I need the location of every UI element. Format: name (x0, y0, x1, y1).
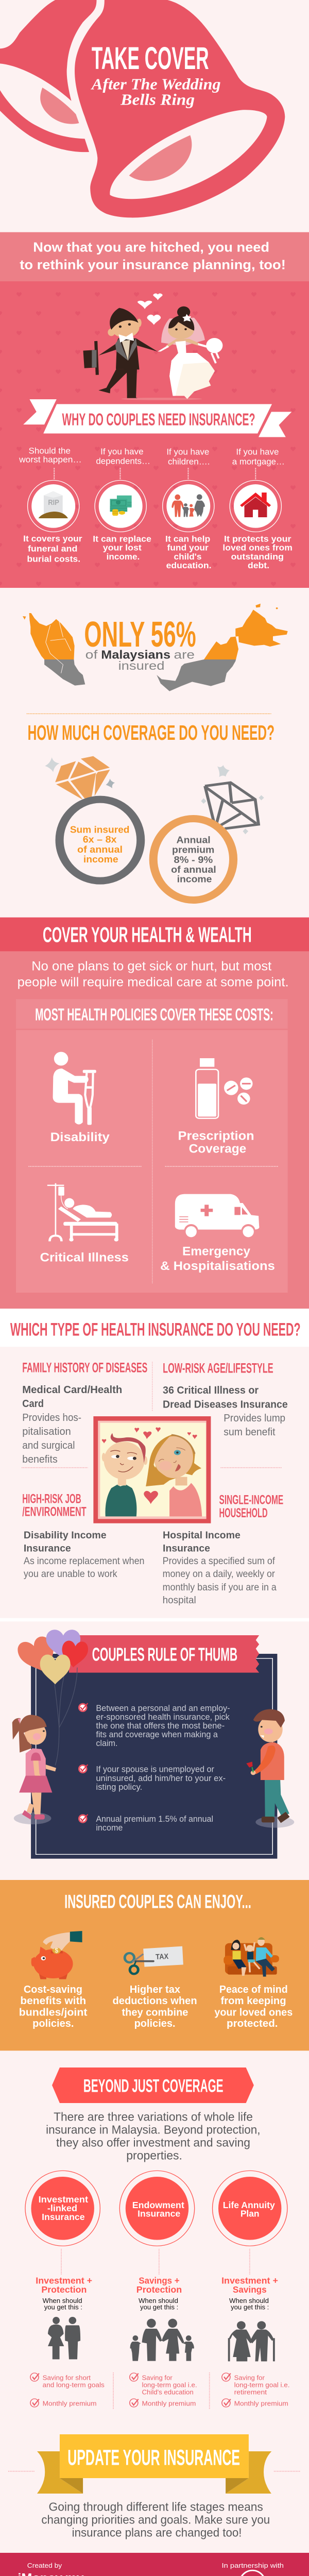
intro text: There are three variations of whole life (54, 2111, 253, 2124)
checklist: Monthly premium (142, 2400, 196, 2408)
checklist (130, 2373, 197, 2408)
caption: of Malaysians are insured: are (174, 648, 195, 662)
checklist: Saving for (142, 2374, 173, 2382)
chart: map of Malaysia 56 percent filled (23, 604, 288, 691)
text block: family history of diseases: Card (22, 1398, 44, 1410)
column: endowment insurance (119, 2171, 197, 2408)
cost: prescription coverage (178, 1058, 254, 1156)
column: investment-linked insurance: -linked (47, 2203, 77, 2213)
column: endowment insurance: you get this : (140, 2303, 178, 2311)
text block: single-income household: monthly basis if you are in a (163, 1582, 277, 1593)
caption: of Malaysians are insured (85, 648, 195, 673)
subtitle: Bells Ring (120, 91, 195, 109)
column: life annuity plan: Savings (233, 2284, 267, 2295)
credit: iMoney (18, 2562, 84, 2576)
reason: dependents: dependents… (96, 456, 150, 466)
reason: funeral: worst happen… (19, 455, 82, 464)
closing text (41, 2501, 270, 2539)
panel: Malaysia map statistic (23, 604, 288, 691)
reason: children (163, 447, 214, 570)
cost: disability: Disability (50, 1131, 110, 1144)
cost: disability (50, 1052, 110, 1144)
cost: prescription coverage: Coverage (189, 1142, 246, 1156)
rule two: If your spouse is unemployed or (96, 1764, 214, 1774)
benefit: cost saving: bundles/joint (19, 2006, 88, 2018)
checklist (30, 2373, 105, 2408)
icon: gravestone: RIP (48, 499, 59, 507)
rule three: income (96, 1823, 123, 1833)
rule one: claim. (96, 1738, 117, 1748)
column: life annuity plan: Investment + (221, 2276, 278, 2285)
intro heading: to rethink your insurance planning, too! (20, 257, 286, 272)
reason: funeral (19, 446, 82, 564)
benefit: higher tax deductions: policies. (134, 2017, 176, 2029)
text block: family history of diseases: Medical Card/Health (22, 1384, 122, 1396)
illustration: bride and groom (83, 293, 222, 400)
reason: mortgage: debt. (248, 561, 269, 570)
column: life annuity plan: Life Annuity (223, 2200, 275, 2210)
icon: outlined diamond ring with annual premium: income (177, 874, 212, 885)
icon: young couple (48, 2317, 80, 2359)
column: life annuity plan: Plan (241, 2209, 260, 2218)
text block: low-risk age and lifestyle: Provides lump (224, 1412, 285, 1424)
benefit: higher tax deductions: Higher tax (130, 1983, 181, 1995)
panel: beyond just coverage (25, 2067, 289, 2410)
benefit: peace of mind: your loved ones (214, 2006, 293, 2018)
benefit: peace of mind: Peace of mind (219, 1983, 288, 1995)
rule three: Annual premium 1.5% of annual (96, 1814, 213, 1824)
panel: how much coverage (27, 714, 274, 900)
icon: family (171, 494, 205, 517)
checklist: Saving for short (43, 2374, 91, 2382)
text block: family history of diseases: and surgical (22, 1439, 75, 1451)
icon: outlined diamond ring with annual premium: Annual (176, 835, 211, 845)
closing text: insurance plans are changed too! (72, 2527, 242, 2539)
checklist (222, 2373, 289, 2408)
icon: small left bell (0, 0, 96, 152)
icon: outlined diamond ring with annual premium: of annual (171, 865, 216, 875)
column: endowment insurance: When should (139, 2297, 178, 2305)
statistic: only 56 percent: ONLY 56% (84, 614, 196, 654)
panel: cover your health and wealth (0, 918, 309, 1309)
reason: mortgage: It protects your (224, 534, 291, 544)
icon: money (110, 496, 132, 516)
benefit: higher tax deductions: they combine (122, 2006, 188, 2018)
text block: family history of diseases: benefits (22, 1453, 58, 1465)
credit: iMoney: Created by (27, 2562, 62, 2570)
icon: house (240, 493, 271, 517)
benefit: peace of mind: from keeping (221, 1994, 286, 2007)
text block: high-risk job: /ENVIRONMENT (22, 1504, 87, 1519)
text block: high-risk job: Insurance (24, 1543, 71, 1554)
column: investment-linked insurance: you get this : (44, 2303, 82, 2311)
benefit: higher tax deductions (112, 1946, 197, 2029)
panel: why couples need insurance (0, 281, 309, 588)
icon: orange diamond ring with sum insured: of annual (77, 844, 123, 855)
intro text: people will require medical care at some point. (18, 975, 289, 989)
text block: low-risk age and lifestyle (163, 1361, 288, 1438)
credit: AIA partner logo: In partnership with (221, 2562, 284, 2570)
text block: family history of diseases: pitalisation (22, 1426, 71, 1437)
reason: funeral: burial costs. (27, 554, 80, 564)
reason: dependents: your lost (103, 543, 142, 552)
column: investment-linked insurance: Insurance (42, 2212, 85, 2222)
column: endowment insurance: Endowment (132, 2200, 184, 2210)
closing text: changing priorities and goals. Make sure you (41, 2514, 270, 2527)
caption: of Malaysians are insured: Malaysians (101, 648, 170, 662)
icon: outlined diamond ring with annual premium: 8% - 9% (174, 855, 213, 866)
intro heading: Now that you are hitched, you need (33, 240, 269, 255)
text block: family history of diseases: Provides hos- (22, 1412, 81, 1423)
benefit: peace of mind (214, 1937, 293, 2029)
icon: big right bell (75, 0, 285, 217)
icon: family with children (130, 2319, 194, 2361)
reason: children: children…. (168, 457, 210, 466)
column: life annuity plan: you get this : (231, 2303, 269, 2311)
benefit: cost saving (19, 1931, 88, 2029)
text block: family history of diseases: FAMILY HISTORY OF DISEASES (22, 1360, 147, 1376)
cost: critical illness (40, 1183, 129, 1264)
reason: mortgage: a mortgage… (232, 457, 285, 466)
illustration: framed couple portrait (93, 1416, 211, 1523)
panel: which type of health insurance (0, 1309, 309, 1621)
cost: critical illness: Critical Illness (40, 1251, 129, 1264)
reason: mortgage: outstanding (231, 552, 284, 562)
rule one (78, 1703, 230, 1748)
panel: health policies costs (16, 999, 288, 1293)
caption: of Malaysians are insured: insured (118, 659, 165, 673)
subtitle: After The Wedding (91, 76, 221, 93)
reason: dependents: It can replace (93, 534, 151, 544)
rule two: uninsured, add him/her to your ex- (96, 1773, 226, 1783)
reason: dependents: If you have (100, 447, 144, 456)
cost: emergency and hospitalisations: Emergency (182, 1245, 251, 1258)
four reasons (19, 446, 293, 570)
column: investment-linked insurance: Investment + (36, 2276, 92, 2285)
reason: children: It can help (165, 534, 210, 544)
reason: mortgage (222, 447, 293, 570)
banner: why do couples need insurance (23, 399, 291, 437)
banner: update your insurance (37, 2434, 271, 2494)
reason: mortgage: loved ones from (222, 543, 293, 552)
column: life annuity plan: When should (229, 2297, 269, 2305)
benefit: cost saving: Cost-saving (24, 1983, 82, 1995)
reason: dependents: income. (107, 552, 140, 562)
text block: single-income household: money on a daily, weekly or (163, 1568, 275, 1580)
hero: wedding bells and title (0, 0, 285, 217)
caption: of Malaysians are insured: of (85, 648, 98, 662)
rule two: isting policy. (96, 1782, 142, 1792)
column: investment-linked insurance (25, 2171, 105, 2408)
icon: orange diamond ring with sum insured: income (83, 854, 118, 865)
illustration: heart balloons (14, 1630, 89, 1766)
closing text: Going through different life stages means (49, 2501, 263, 2514)
checklist: long-term goal i.e. (234, 2381, 289, 2389)
text block: high-risk job: As income replacement when (24, 1555, 144, 1567)
checklist: and long-term goals (43, 2381, 105, 2389)
intro text: insurance in Malaysia. Beyond protection, (46, 2124, 260, 2137)
text block: single-income household: Provides a specified sum of (163, 1555, 275, 1567)
illustration: girl holding balloons (12, 1715, 56, 1824)
text block: high-risk job: Disability Income (24, 1530, 107, 1541)
text block: single-income household: Insurance (163, 1543, 210, 1554)
icon: elderly couple with canes (228, 2321, 275, 2361)
column: endowment insurance: Insurance (138, 2209, 180, 2218)
checklist: Monthly premium (234, 2400, 288, 2408)
text block: single-income household (163, 1492, 283, 1606)
checklist: Monthly premium (43, 2400, 96, 2408)
icon: outlined diamond ring with annual premium: premium (172, 845, 214, 855)
checklist: retirement (234, 2388, 267, 2396)
benefit: peace of mind: protected. (227, 2017, 278, 2029)
rule one: er-sponsored health insurance, pick (96, 1712, 230, 1722)
rule two (78, 1764, 226, 1792)
icon: orange diamond ring with sum insured: Sum insured (70, 825, 129, 835)
rule one: the one that offers the most bene- (96, 1721, 225, 1731)
reason: children: child's (174, 552, 201, 562)
intro heading (20, 240, 286, 272)
column: investment-linked insurance: Protection (41, 2284, 87, 2295)
footer band (0, 2553, 309, 2576)
text block: single-income household: hospital (163, 1595, 196, 1606)
subtitle (91, 76, 221, 109)
text block: high-risk job (22, 1491, 144, 1580)
checklist: Child's education (142, 2388, 194, 2396)
text block: high-risk job: HIGH-RISK JOB (22, 1491, 81, 1506)
rule one: Between a personal and an employ- (96, 1703, 230, 1713)
credit: AIA partner logo (221, 2562, 284, 2576)
benefit: higher tax deductions: TAX (156, 1953, 169, 1961)
column: investment-linked insurance: Investment (39, 2194, 88, 2205)
reason: children: education. (166, 561, 212, 570)
benefit: cost saving: policies. (32, 2017, 74, 2029)
benefit: higher tax deductions: deductions when (112, 1994, 197, 2007)
icon: orange diamond ring with sum insured (45, 756, 141, 881)
intro text: No one plans to get sick or hurt, but most (31, 959, 272, 973)
reason: children: fund your (167, 543, 209, 552)
panel: couples rule of thumb (12, 1630, 294, 1859)
text block: high-risk job: you are unable to work (24, 1568, 117, 1580)
icon: orange diamond ring with sum insured: 6x – 8x (83, 835, 117, 845)
text block: low-risk age and lifestyle: sum benefit (224, 1426, 276, 1438)
panel: update your insurance (0, 2434, 309, 2576)
reason: dependents (93, 447, 151, 562)
cost: emergency and hospitalisations: & Hospitalisations (160, 1260, 275, 1273)
column: endowment insurance: Savings + (139, 2276, 180, 2285)
text block: low-risk age and lifestyle: 36 Critical Illness or (163, 1384, 259, 1396)
icon: outlined diamond ring with annual premium (153, 765, 264, 900)
benefit: cost saving: $ (55, 1947, 59, 1954)
cost: prescription coverage: Prescription (178, 1129, 254, 1143)
text block: single-income household: Hospital Income (163, 1530, 241, 1541)
illustration: boy with rose (246, 1709, 294, 1828)
cost: emergency and hospitalisations (160, 1194, 275, 1273)
rule three (78, 1814, 213, 1833)
checklist: long-term goal i.e. (142, 2381, 197, 2389)
intro text (46, 2111, 260, 2162)
intro text (18, 959, 289, 989)
column: life annuity plan (212, 2171, 289, 2408)
rule one: fits and coverage when making a (96, 1730, 218, 1739)
reason: funeral: funeral and (28, 544, 77, 553)
reason: funeral: It covers your (23, 534, 82, 544)
column: endowment insurance: Protection (136, 2284, 182, 2295)
reason: mortgage: If you have (236, 447, 279, 456)
intro text: they also offer investment and saving (56, 2137, 250, 2149)
icon: gravestone (39, 491, 68, 518)
panel: insured couples can enjoy (0, 1880, 309, 2050)
benefit: cost saving: benefits with (20, 1994, 86, 2007)
reason: children: If you have (166, 447, 209, 456)
column: investment-linked insurance: When should (43, 2297, 82, 2305)
reason: funeral: Should the (28, 446, 71, 455)
text block: low-risk age and lifestyle: Dread Diseases Insurance (163, 1399, 288, 1410)
intro text: properties. (126, 2149, 182, 2162)
checklist: Saving for (234, 2374, 265, 2382)
panel: intro stripe (0, 232, 309, 281)
text block: family history of diseases (22, 1360, 147, 1465)
